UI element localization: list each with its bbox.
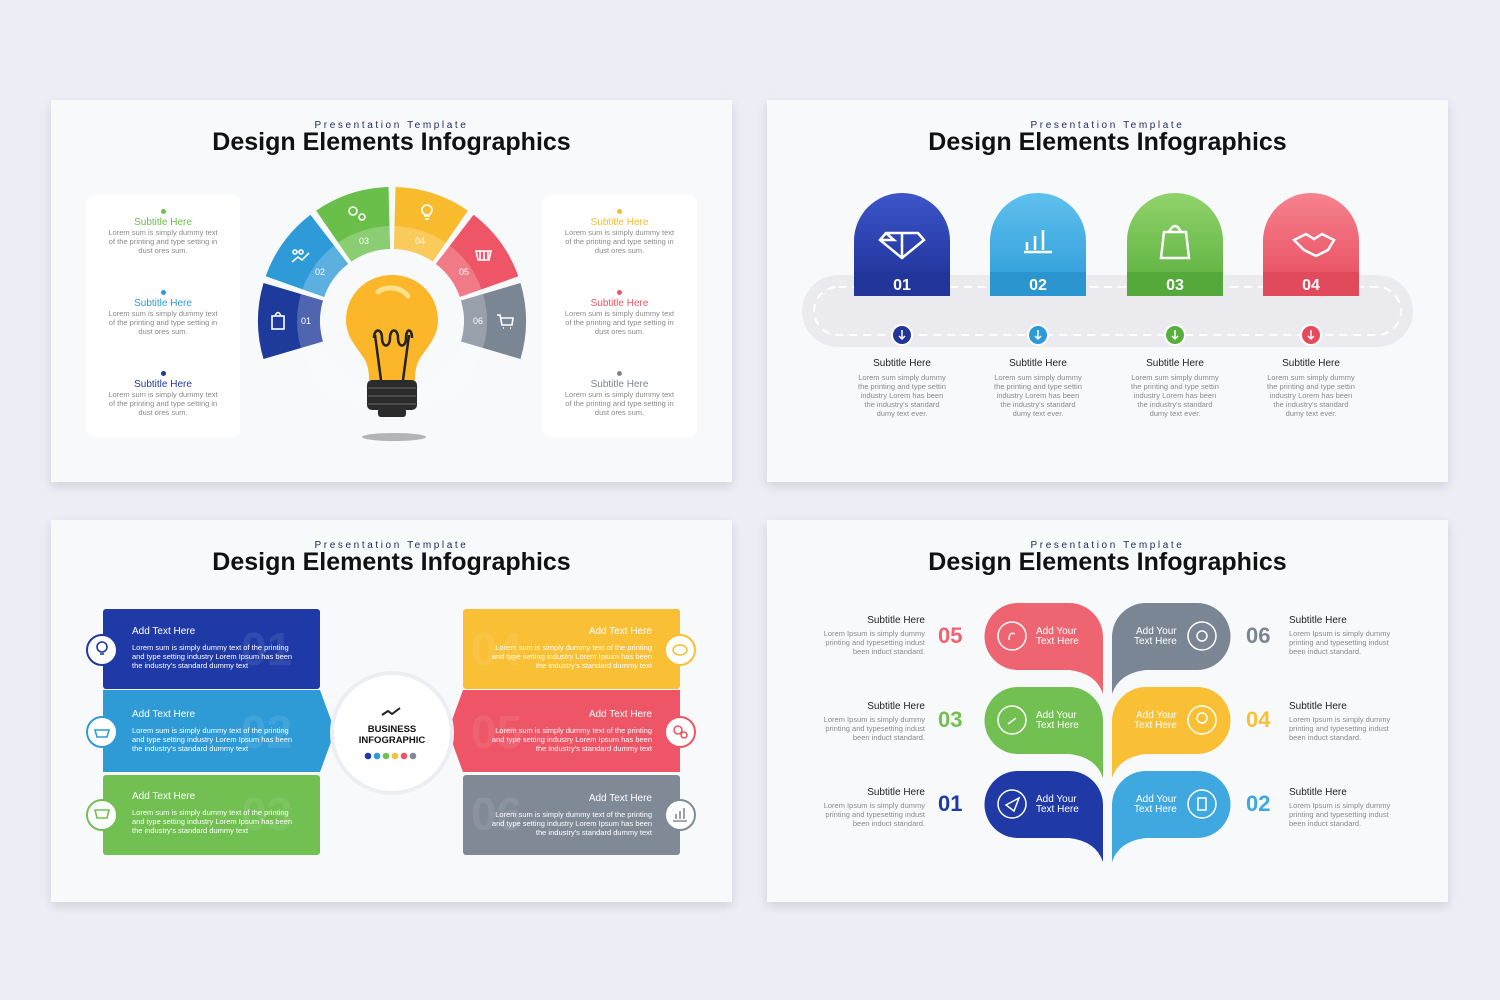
step text 4: Subtitle Here	[1282, 358, 1340, 369]
text: block 3: Add Text Here	[132, 791, 195, 802]
bubbles graphic: Add Your	[1036, 710, 1077, 721]
step texts: Lorem sum simply dummy	[858, 373, 946, 382]
blocks graphic: 04	[471, 623, 523, 675]
text: block 3: and type setting industry Lorem Ipsum has been	[132, 817, 292, 826]
bubbles graphic: 05	[938, 623, 962, 648]
left texts: printing and typesetting indust	[825, 810, 925, 819]
text: block 2: the industry's standard dummy text	[132, 744, 248, 753]
chart: arc segments with bulb: 04	[415, 236, 425, 246]
chart: arc segments with bulb	[258, 187, 526, 441]
text: block 3: the industry's standard dummy text	[132, 826, 248, 835]
text: block 6	[492, 793, 652, 837]
right texts: Lorem Ipsum is simply dummy	[1289, 715, 1390, 724]
heading: Design Elements Infographics	[928, 548, 1287, 576]
blocks graphic: 05	[471, 706, 522, 758]
text: block 5: Add Text Here	[589, 709, 652, 720]
subtitle: Presentation Template	[315, 120, 468, 131]
item: yellow: dust ores sum.	[595, 246, 644, 255]
step text 3: Lorem sum simply dummy	[1131, 373, 1219, 382]
chart: arc segments with bulb: 05	[459, 267, 469, 277]
text: block 5: and type setting industry Lorem Ipsum has been	[492, 735, 652, 744]
subtitle: Presentation Template	[1031, 120, 1184, 131]
step text 2: industry Lorem has been	[997, 391, 1079, 400]
heading: Design Elements Infographics	[928, 128, 1287, 156]
right text card	[542, 195, 697, 437]
blocks graphic: BUSINESS	[368, 724, 416, 735]
item: blue: of the printing and type setting in	[109, 318, 217, 327]
step text 2: Subtitle Here	[1009, 358, 1067, 369]
bubbles graphic: Text Here	[1036, 636, 1079, 647]
chart: arc segments with bulb: 06	[473, 316, 483, 326]
right texts: printing and typesetting indust	[1289, 810, 1389, 819]
text: block 1: Add Text Here	[132, 626, 195, 637]
chart: arc segments with bulb: 01	[301, 316, 311, 326]
panel: speech bubbles	[767, 520, 1448, 902]
right texts: printing and typesetting indust	[1289, 724, 1389, 733]
item: gray: dust ores sum.	[595, 408, 644, 417]
step text 2: Lorem sum simply dummy	[994, 373, 1082, 382]
bubbles graphic: Add Your	[1136, 794, 1177, 805]
heading: Design Elements Infographics	[212, 128, 571, 156]
text: block 2: Add Text Here	[132, 709, 195, 720]
right texts: been induct standard.	[1289, 733, 1361, 742]
left text card	[86, 195, 240, 437]
item: navy: Subtitle Here	[134, 379, 192, 390]
item: gray: of the printing and type setting in	[565, 399, 674, 408]
bubbles graphic: 03	[938, 707, 962, 732]
blocks graphic: 03	[241, 788, 292, 840]
bubbles graphic	[938, 603, 1271, 862]
bubbles graphic: Add Your	[1136, 626, 1177, 637]
chart: arc segments with bulb: 03	[359, 236, 369, 246]
right texts: Subtitle Here	[1289, 615, 1347, 626]
road graphic: 03	[1166, 277, 1184, 294]
bubbles graphic: Add Your	[1136, 710, 1177, 721]
text: block 4	[492, 626, 652, 670]
step text 2: the printing and type settin	[994, 382, 1082, 391]
item: navy: of the printing and type setting in	[109, 399, 217, 408]
item: blue: Lorem sum is simply dummy text	[108, 309, 218, 318]
bubbles graphic: 06	[1246, 623, 1270, 648]
chart: arc segments with bulb: 02	[315, 267, 325, 277]
left texts: been induct standard.	[853, 647, 925, 656]
road graphic: 04	[1302, 277, 1320, 294]
item: blue: Subtitle Here	[134, 298, 192, 309]
left texts: Lorem Ipsum is simply dummy	[824, 801, 925, 810]
text: block 4: the industry's standard dummy text	[536, 661, 652, 670]
item: green: of the printing and type setting in	[109, 237, 217, 246]
panel: light bulb arc	[51, 100, 732, 482]
blocks graphic	[86, 609, 696, 855]
step text 4: the printing and type settin	[1267, 382, 1355, 391]
left texts: Subtitle Here	[867, 787, 925, 798]
item: red: of the printing and type setting in	[565, 318, 674, 327]
left texts: Lorem Ipsum is simply dummy	[824, 715, 925, 724]
bubbles graphic: 01	[938, 791, 962, 816]
item: navy	[108, 371, 218, 417]
text: block 4: and type setting industry Lorem Ipsum has been	[492, 652, 652, 661]
step text 2: dumy text ever.	[1013, 409, 1063, 418]
text: block 5: the industry's standard dummy text	[536, 744, 652, 753]
text: block 2: Lorem sum is simply dummy text of the printing	[132, 726, 289, 735]
step text 4: the industry's standard	[1273, 400, 1349, 409]
blocks graphic: INFOGRAPHIC	[359, 735, 425, 746]
right texts	[1289, 615, 1390, 828]
item: red: dust ores sum.	[595, 327, 644, 336]
step text 2: the industry's standard	[1000, 400, 1076, 409]
text: block 1	[132, 626, 292, 670]
item: yellow: Lorem sum is simply dummy text	[565, 228, 674, 237]
right texts: Subtitle Here	[1289, 701, 1347, 712]
step text 3: the industry's standard	[1137, 400, 1213, 409]
item: red: Lorem sum is simply dummy text	[565, 309, 674, 318]
text: block 6: Lorem sum is simply dummy text of the printing	[495, 810, 652, 819]
subtitle: Presentation Template	[315, 540, 468, 551]
text: block 4: Add Text Here	[589, 626, 652, 637]
step text 3: dumy text ever.	[1150, 409, 1200, 418]
step texts	[858, 358, 946, 418]
step text 3: the printing and type settin	[1131, 382, 1219, 391]
text: block 5	[492, 709, 652, 753]
left texts: printing and typesetting indust	[825, 724, 925, 733]
item: navy: dust ores sum.	[138, 408, 188, 417]
step texts: dumy text ever.	[877, 409, 927, 418]
step text 4: dumy text ever.	[1286, 409, 1336, 418]
road graphic: 01	[893, 277, 911, 294]
item: gray	[565, 371, 674, 417]
item: blue: dust ores sum.	[138, 327, 188, 336]
text: block 1: and type setting industry Lorem Ipsum has been	[132, 652, 292, 661]
text: block 2: and type setting industry Lorem Ipsum has been	[132, 735, 292, 744]
left texts: been induct standard.	[853, 733, 925, 742]
item: red: Subtitle Here	[591, 298, 648, 309]
left texts: Subtitle Here	[867, 615, 925, 626]
right texts: Subtitle Here	[1289, 787, 1347, 798]
text: block 1: the industry's standard dummy text	[132, 661, 248, 670]
bubbles graphic: 04	[1246, 707, 1271, 732]
text: block 4: Lorem sum is simply dummy text of the printing	[495, 643, 652, 652]
bubbles graphic: 02	[1246, 791, 1270, 816]
left texts: printing and typesetting indust	[825, 638, 925, 647]
road graphic: 02	[1029, 277, 1047, 294]
bubbles graphic: Add Your	[1036, 626, 1077, 637]
bubbles graphic: Add Your	[1036, 794, 1077, 805]
bubbles graphic: Text Here	[1036, 804, 1079, 815]
bubbles graphic: Text Here	[1134, 720, 1177, 731]
panel: business infographic	[51, 520, 732, 902]
panel: road steps	[767, 100, 1448, 482]
left texts: Lorem Ipsum is simply dummy	[824, 629, 925, 638]
text: block 6: and type setting industry Lorem Ipsum has been	[492, 819, 652, 828]
left texts: Subtitle Here	[867, 701, 925, 712]
heading: Design Elements Infographics	[212, 548, 571, 576]
text: block 6: the industry's standard dummy text	[536, 828, 652, 837]
item: green: Subtitle Here	[134, 217, 192, 228]
subtitle: Presentation Template	[1031, 540, 1184, 551]
item: yellow: Subtitle Here	[591, 217, 648, 228]
text: block 5: Lorem sum is simply dummy text of the printing	[495, 726, 652, 735]
item: green: Lorem sum is simply dummy text	[108, 228, 218, 237]
step text 2	[994, 358, 1082, 418]
right texts: been induct standard.	[1289, 647, 1361, 656]
step text 3: industry Lorem has been	[1134, 391, 1216, 400]
step text 3: Subtitle Here	[1146, 358, 1204, 369]
item: green	[108, 209, 218, 255]
right texts: Lorem Ipsum is simply dummy	[1289, 629, 1390, 638]
right texts: Lorem Ipsum is simply dummy	[1289, 801, 1390, 810]
step texts: Subtitle Here	[873, 358, 931, 369]
text: block 3: Lorem sum is simply dummy text of the printing	[132, 808, 289, 817]
item: gray: Lorem sum is simply dummy text	[565, 390, 674, 399]
step texts: the industry's standard	[864, 400, 940, 409]
right texts: printing and typesetting indust	[1289, 638, 1389, 647]
right texts: been induct standard.	[1289, 819, 1361, 828]
left texts: been induct standard.	[853, 819, 925, 828]
item: green: dust ores sum.	[138, 246, 188, 255]
text: block 6: Add Text Here	[589, 793, 652, 804]
text: block 2	[132, 709, 292, 753]
blocks graphic: 06	[471, 788, 522, 840]
step texts: industry Lorem has been	[861, 391, 943, 400]
item: yellow: of the printing and type setting in	[565, 237, 674, 246]
text: block 3	[132, 791, 292, 835]
item: gray: Subtitle Here	[591, 379, 648, 390]
item: blue	[108, 290, 218, 336]
step text 4	[1267, 358, 1355, 418]
blocks graphic: 02	[241, 706, 292, 758]
left texts	[824, 615, 925, 828]
item: red	[565, 290, 674, 336]
text: block 1: Lorem sum is simply dummy text of the printing	[132, 643, 289, 652]
road graphic	[802, 193, 1413, 347]
item: yellow	[565, 209, 674, 255]
bubbles graphic: Text Here	[1134, 804, 1177, 815]
step text 4: Lorem sum simply dummy	[1267, 373, 1355, 382]
step texts: the printing and type settin	[858, 382, 946, 391]
step text 4: industry Lorem has been	[1270, 391, 1352, 400]
bubbles graphic: Text Here	[1134, 636, 1177, 647]
step text 3	[1131, 358, 1219, 418]
bubbles graphic: Text Here	[1036, 720, 1079, 731]
item: navy: Lorem sum is simply dummy text	[108, 390, 218, 399]
blocks graphic: 01	[241, 623, 292, 675]
